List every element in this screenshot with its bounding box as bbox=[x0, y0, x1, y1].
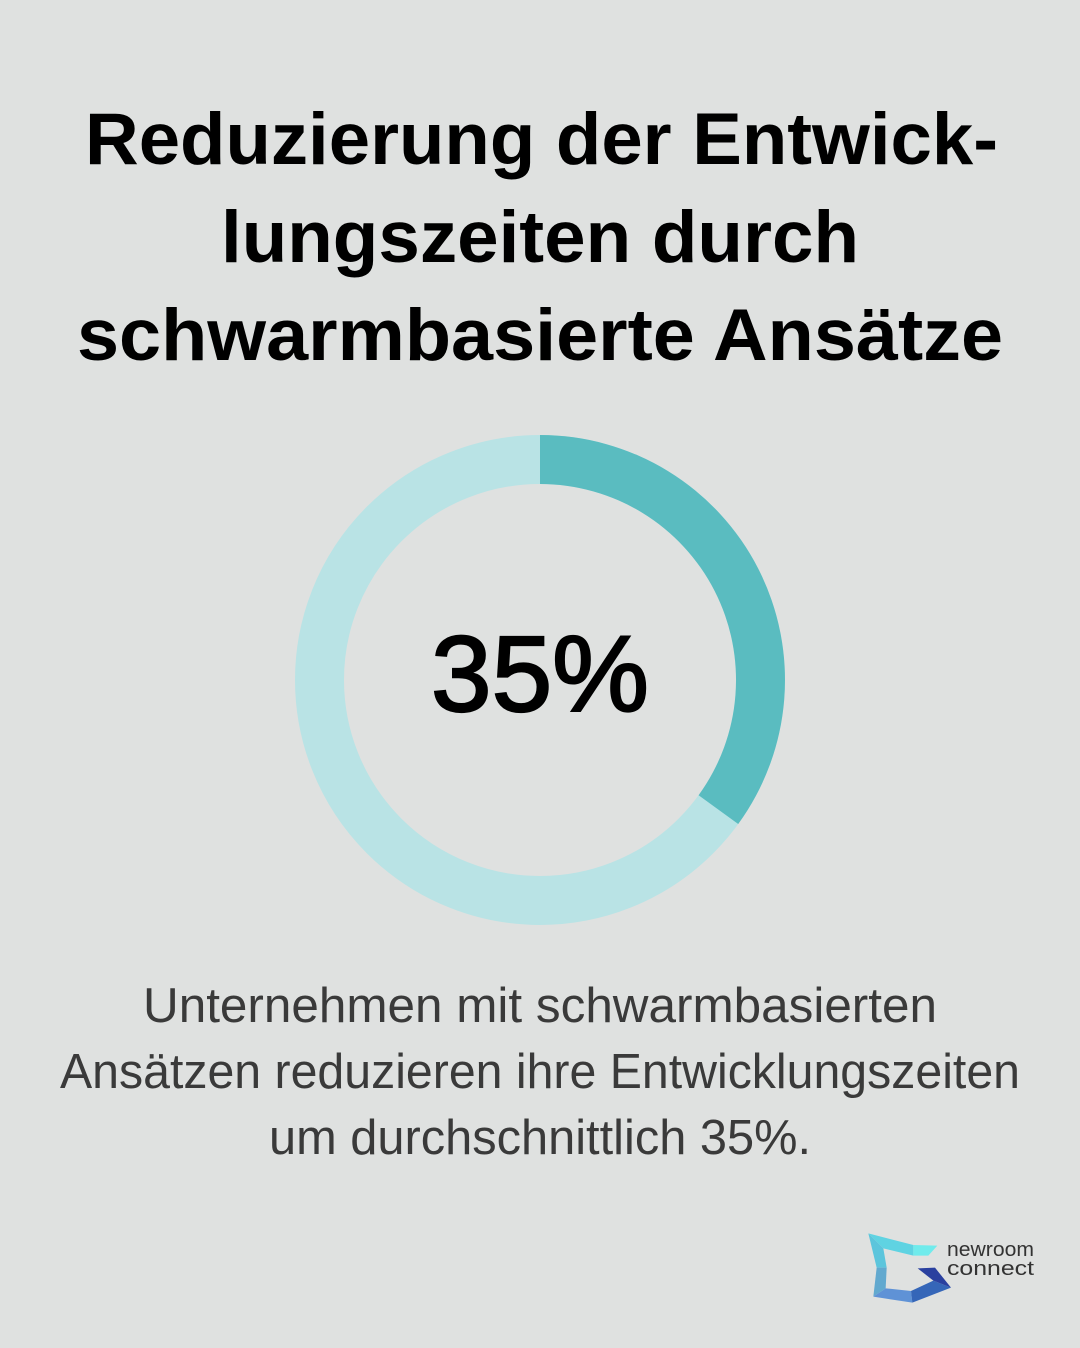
donut chart: 35 percent bbox=[320, 435, 785, 900]
description text: Ansätzen reduzieren ihre Entwicklungszeiten bbox=[60, 1045, 1020, 1099]
logo wordmark bbox=[947, 1239, 1035, 1280]
title: Reduzierung der Entwick- bbox=[85, 99, 998, 180]
logo icon bbox=[868, 1233, 951, 1303]
description text bbox=[60, 979, 1020, 1165]
title bbox=[77, 99, 1003, 376]
description text: um durchschnittlich 35%. bbox=[269, 1111, 811, 1165]
logo wordmark: connect bbox=[947, 1258, 1035, 1280]
donut value: 35% bbox=[431, 613, 649, 734]
logo wordmark: newroom bbox=[947, 1239, 1034, 1261]
logo: newroom connect bbox=[868, 1233, 1035, 1303]
title: schwarmbasierte Ansätze bbox=[77, 295, 1003, 376]
description text: Unternehmen mit schwarmbasierten bbox=[143, 979, 937, 1033]
title: lungszeiten durch bbox=[221, 197, 859, 278]
